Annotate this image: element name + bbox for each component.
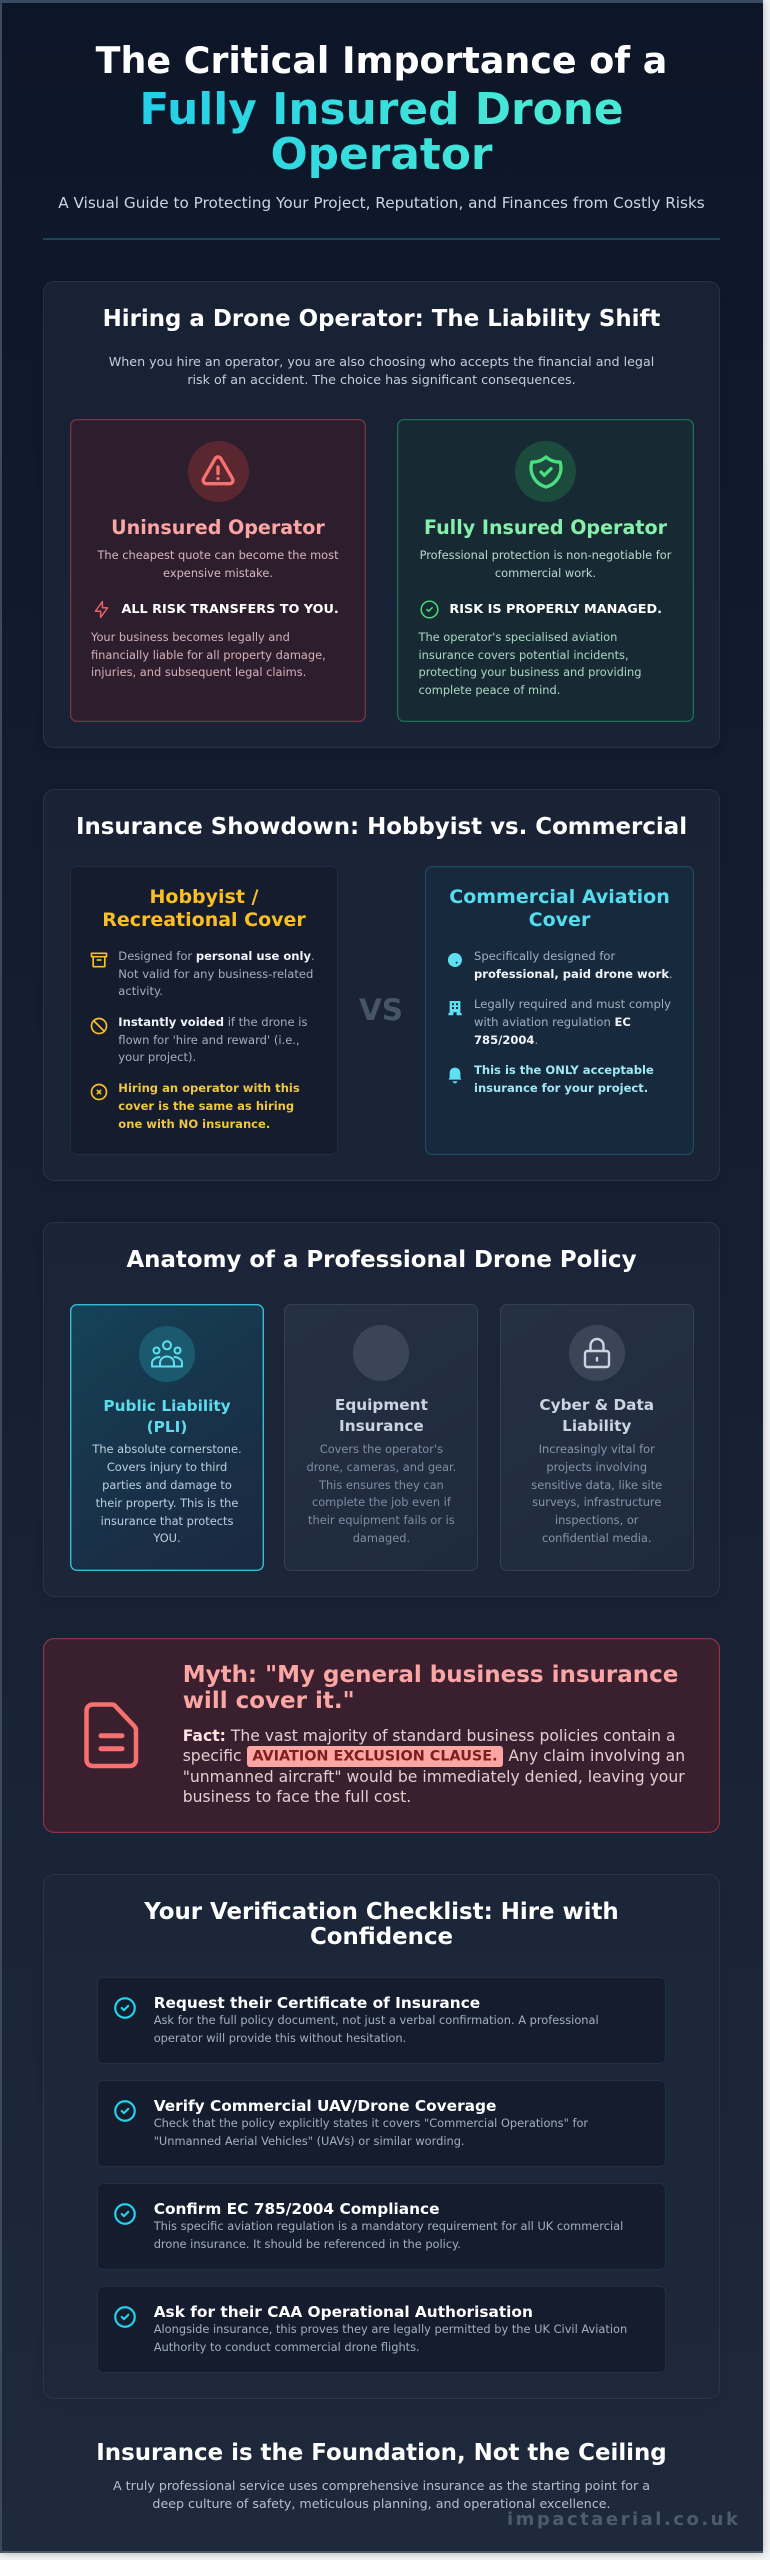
card body: drone, cameras, and gear. [306,1460,456,1474]
card tagline: Professional protection is non-negotiable for [420,548,671,562]
card body [306,1442,456,1545]
intro text: risk of an accident. The choice has significant consequences. [187,372,576,387]
item description: Alongside insurance, this proves they are legally permitted by the UK Civil Aviation [154,2322,627,2336]
intro text: When you hire an operator, you are also choosing who accepts the financial and legal [109,354,654,369]
panel: policy anatomy [43,1222,720,1597]
title line: The Critical Importance of a [96,39,667,82]
point: legally required: 785/2004. [474,1033,538,1047]
icon: check circle [420,600,439,618]
card body: damaged. [353,1531,410,1545]
icon: x circle [90,1084,108,1100]
card heading [539,1396,654,1435]
fact text [183,1726,685,1806]
heading: Confidence [310,1924,453,1950]
card heading: Hobbyist / [150,886,258,908]
icon: check circle [114,2306,136,2328]
item description: Authority to conduct commercial drone flights. [154,2340,420,2354]
item description: operator will provide this without hesitation. [154,2031,406,2045]
point: designed for professional work: professional, paid drone work. [474,967,673,981]
card body: Covers injury to third [107,1460,227,1474]
card body: YOU. [153,1531,181,1545]
card body [531,1442,662,1545]
point: legally required: with aviation regulation EC [474,1015,631,1029]
card heading [103,1397,231,1436]
point: voided: Instantly voided if the drone is [118,1015,307,1029]
card body: their equipment fails or is [308,1513,455,1527]
card body: their property. This is the [96,1496,238,1510]
card body: Covers the operator's [320,1442,443,1456]
point: only acceptable [448,1063,654,1095]
panel: verification checklist [43,1874,720,2399]
point: only acceptable: insurance for your project. [474,1081,648,1095]
card tagline [420,548,672,580]
item description [154,2322,627,2354]
card: uninsured operator [70,419,366,722]
card heading: Fully Insured Operator [424,516,667,539]
card body: projects involving [546,1460,647,1474]
icon: people [139,1326,195,1382]
card: fully insured operator [397,419,694,722]
card body: sensitive data, like site [531,1478,662,1492]
card body: inspections, or [555,1513,638,1527]
fact text: business to face the full cost. [183,1788,411,1806]
item title: Request their Certificate of Insurance [154,1994,480,2012]
point: voided: your project). [118,1050,196,1064]
icon: check circle [114,2100,136,2122]
point: personal use [90,949,315,998]
point: warning: cover is the same as hiring [118,1099,294,1113]
checklist item 1 [97,1977,666,2064]
icon: filled circle [448,953,462,967]
card heading [102,886,306,931]
icon: bell [448,1068,462,1084]
myth heading: Myth: "My general business insurance [183,1662,678,1688]
footer [43,2430,720,2514]
card body: insurance covers potential incidents, [418,648,629,662]
footer heading: Insurance is the Foundation, Not the Ceiling [96,2440,667,2466]
card heading: Equipment [335,1396,428,1414]
card heading: (PLI) [147,1418,187,1436]
card body [418,630,642,697]
icon: building [448,1001,462,1016]
subtitle: A Visual Guide to Protecting Your Project, Reputation, and Finances from Costly Risks [58,194,705,212]
header divider [43,238,720,240]
card body: financially liable for all property damage, [91,648,326,662]
title highlight: Operator [270,129,493,180]
card: cyber and data liability [500,1304,694,1571]
point: only acceptable: This is the ONLY acceptable [474,1063,654,1077]
card body: protecting your business and providing [418,665,642,679]
card body: Your business becomes legally and [91,630,290,644]
footer text: deep culture of safety, meticulous planning, and operational excellence. [152,2496,611,2511]
item title: Ask for their CAA Operational Authorisation [154,2303,533,2321]
card heading: Commercial Aviation [449,886,670,908]
item description: "Unmanned Aerial Vehicles" (UAVs) or similar wording. [154,2134,465,2148]
fact text: Fact: The vast majority of standard business policies contain a [183,1726,676,1744]
title highlight: Fully Insured Drone [139,84,624,134]
point: voided [90,1015,307,1064]
item description: This specific aviation regulation is a mandatory requirement for all UK commercial [154,2219,623,2233]
fact text: "unmanned aircraft" would be immediately denied, leaving your [183,1768,685,1786]
item title: Confirm EC 785/2004 Compliance [154,2200,440,2218]
heading: Insurance Showdown: Hobbyist vs. Commercial [76,814,687,840]
icon: check circle [114,2203,136,2225]
point: warning: Hiring an operator with this [118,1081,300,1095]
myth heading [183,1662,678,1714]
card: equipment insurance [284,1304,478,1571]
checklist item 2 [97,2080,666,2167]
risk statement: RISK IS PROPERLY MANAGED. [449,602,662,617]
icon: document [84,1702,138,1768]
card body: The absolute cornerstone. [92,1442,242,1456]
panel: liability shift [43,281,720,748]
heading: Your Verification Checklist: Hire with [144,1899,619,1925]
card body [91,630,326,679]
card heading: Uninsured Operator [111,516,325,539]
VS label: VS [359,993,403,1027]
myth heading: will cover it." [183,1688,355,1714]
card heading: Insurance [339,1417,424,1435]
card heading: Public Liability [103,1397,231,1415]
icon: shield check [515,441,576,502]
point: legally required [448,997,671,1047]
item description: Ask for the full policy document, not just a verbal confirmation. A professional [154,2013,599,2027]
card: public liability [70,1304,264,1571]
risk statement: ALL RISK TRANSFERS TO YOU. [122,602,339,617]
icon: lightning bolt [94,600,108,618]
item title: Verify Commercial UAV/Drone Coverage [154,2097,496,2115]
card tagline: commercial work. [495,566,596,580]
card: hobbyist cover [70,866,338,1155]
point: personal use: activity. [118,984,163,998]
point: designed for professional work: Specifically designed for [474,949,615,963]
fact text: specific AVIATION EXCLUSION CLAUSE. Any claim involving an [183,1747,685,1765]
checklist item 4 [97,2286,666,2373]
icon: ban [90,1018,108,1034]
header [43,39,720,240]
card heading: Liability [562,1417,631,1435]
point: legally required: Legally required and must comply [474,997,671,1011]
watermark: impactaerial.co.uk [507,2509,740,2530]
card body: surveys, infrastructure [532,1495,661,1509]
checklist item 3 [97,2183,666,2270]
card body: parties and damage to [102,1478,232,1492]
intro text [109,354,654,387]
card body [92,1442,242,1545]
card body: confidential media. [542,1531,652,1545]
card tagline [97,548,339,580]
card body: complete the job even if [312,1495,451,1509]
item description [154,2013,599,2045]
point: personal use: Not valid for any business-related [118,967,313,981]
card body: complete peace of mind. [418,683,560,697]
heading [144,1899,619,1950]
card heading: Recreational Cover [102,909,306,931]
item description [154,2116,588,2148]
item description: drone insurance. It should be referenced in the policy. [154,2237,461,2251]
callout: myth vs fact [43,1638,720,1833]
panel: insurance showdown [43,789,720,1181]
card body: injuries, and subsequent legal claims. [91,665,306,679]
footer text: A truly professional service uses comprehensive insurance as the starting point for a [113,2478,650,2493]
card heading [449,886,670,931]
card: commercial aviation cover [425,866,694,1155]
card body: Increasingly vital for [539,1442,655,1456]
point: voided: flown for 'hire and reward' (i.e., [118,1033,300,1047]
icon: empty circle [353,1325,409,1381]
point: personal use: Designed for personal use only. [118,949,315,963]
card heading: Cover [529,909,590,931]
point: warning [90,1081,300,1131]
card tagline: The cheapest quote can become the most [97,548,339,562]
icon: archive box [90,952,108,968]
title highlight [43,86,720,178]
icon: padlock [569,1325,625,1381]
card body: insurance that protects [101,1514,233,1528]
card heading: Cyber & Data [539,1396,654,1414]
item description [154,2219,623,2251]
heading: Anatomy of a Professional Drone Policy [126,1247,637,1273]
card heading [335,1396,428,1435]
card body: This ensures they can [319,1478,444,1492]
icon: check circle [114,1997,136,2019]
point: warning: one with NO insurance. [118,1117,270,1131]
icon: warning triangle [188,441,248,502]
point: designed for professional work [448,949,673,981]
heading: Hiring a Drone Operator: The Liability Shift [103,306,660,332]
card body: The operator's specialised aviation [418,630,617,644]
card tagline: expensive mistake. [163,566,273,580]
footer text [43,2477,720,2513]
item description: Check that the policy explicitly states it covers "Commercial Operations" for [154,2116,588,2130]
